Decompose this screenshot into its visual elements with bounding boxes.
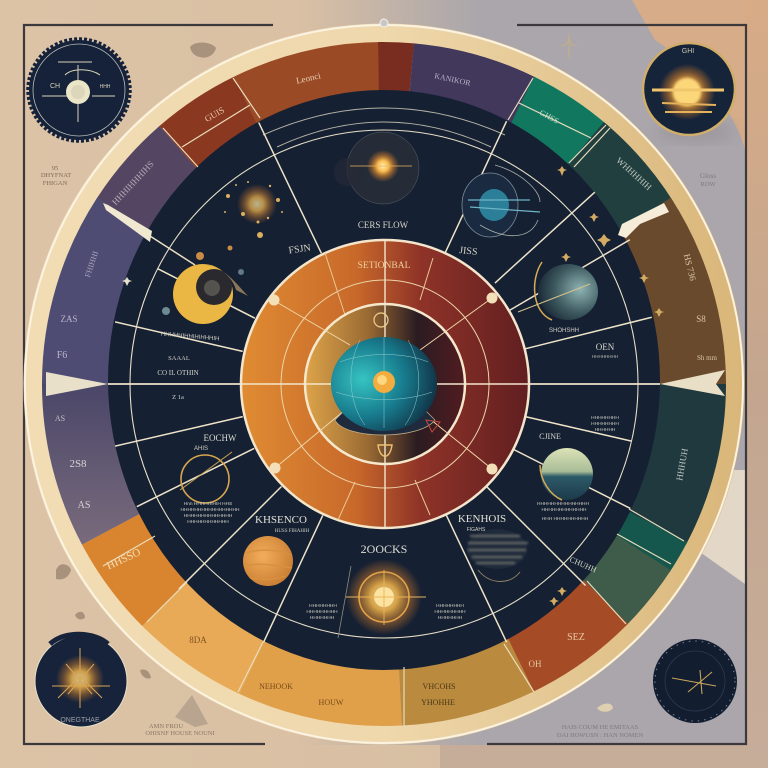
side captions: DAI HOWUSN : HAN NOMEN [557, 732, 643, 739]
planet: green: HHHHHHHH [591, 421, 619, 427]
band labels: FHIHHI [83, 250, 100, 279]
planet: jupiter: HHHHHHHH [309, 603, 337, 609]
segment band [78, 78, 690, 690]
planet: center bottom sun: HHHHHHH [438, 615, 463, 621]
segment: rust upper [183, 109, 250, 153]
band labels: 2S8 [69, 458, 87, 470]
side captions: FHIGAN [43, 180, 68, 187]
planet: gray nebula: OEN [596, 342, 615, 352]
segment: green top [518, 109, 585, 153]
segment: dark teal right [654, 384, 690, 528]
segment: rust lower [516, 598, 602, 660]
band labels: HOUW [319, 698, 344, 707]
planet: center bottom sun: 2OOCKS [361, 542, 407, 556]
node dots [268, 292, 498, 474]
planet: ring planet lower left: Z 1a [172, 394, 184, 401]
band labels: KANIKOR [434, 71, 472, 88]
band labels: HHHUH [674, 447, 690, 481]
segment: dark teal top [581, 150, 644, 222]
band labels: ZAS [60, 314, 78, 324]
medallion: top left: CH [50, 83, 60, 90]
side captions: HAIS COUM HE EMITAAS [562, 724, 639, 731]
side captions: OHISNF HOUSE NOUNI [145, 730, 215, 737]
planet: top sun [334, 132, 419, 230]
planet: gray nebula: SHOHSHH [549, 328, 579, 334]
planet: crescent: SAAAL [168, 355, 190, 362]
radial lines [108, 121, 660, 642]
side captions: AMN FROU [149, 723, 183, 730]
inner wheel: SETIONBAL [358, 261, 411, 271]
planet: blue nebula: JISS [459, 245, 478, 258]
planet: center bottom sun [338, 542, 466, 638]
disc arcs [130, 108, 638, 638]
planet: green: HHHHHH [595, 427, 616, 433]
planet: ring planet lower left: Hnn HHHHHIHIH HHS [184, 501, 232, 507]
planet: blue nebula [459, 165, 540, 258]
segment: purple left [127, 153, 183, 217]
planet: green [537, 415, 619, 522]
inner wheel [240, 240, 530, 528]
planet: jupiter: HHHHHHH [310, 615, 335, 621]
planet: striped [458, 513, 528, 582]
segment: orange [114, 528, 168, 600]
side captions: Gloss [700, 172, 716, 180]
planet: ring planet lower left: HHHHHHHHHHHHHHHHH [181, 507, 240, 513]
band labels: F6 [57, 350, 67, 361]
band labels [55, 70, 718, 707]
band labels: HHSSO [105, 546, 143, 572]
band labels: S8 [696, 314, 706, 324]
band labels: WHHHHIH [614, 155, 654, 193]
band labels: AS [78, 500, 90, 511]
planet: ring planet lower left: HHHHHHHHHHHHHH [184, 513, 233, 519]
band labels: YHOHHE [421, 698, 455, 707]
planet: jupiter: HUSS FIHAHIH [275, 529, 310, 534]
band labels: AS [55, 414, 65, 423]
flag markers [46, 203, 725, 396]
planet: green: HHHHHHHHHHHHH [541, 507, 587, 513]
medallion: bottom right [653, 639, 737, 723]
segment: brown right [641, 217, 690, 384]
medallion: top left [28, 39, 130, 141]
planet: crescent [157, 246, 248, 377]
side captions [41, 165, 716, 739]
band labels: NEHOOK [259, 682, 293, 691]
planet: center bottom sun: HHHHHHHH [436, 603, 464, 609]
band labels: HHHIHHHIHS [110, 159, 156, 207]
segment: gold [168, 600, 255, 661]
planet: striped: KENHOIS [458, 513, 506, 525]
band labels: HS 736 [682, 253, 698, 282]
side captions: ROW [700, 181, 716, 188]
planet: galaxy: FSJN [288, 243, 311, 257]
planet: gray nebula: HHHHHHHH [592, 354, 618, 359]
planet: jupiter: HHHHHHHHH [306, 609, 338, 615]
medallion: top right [643, 43, 735, 135]
band labels: Sh mm [697, 354, 718, 362]
planet: top sun: CERS FLOW [358, 220, 409, 230]
planet: ring planet lower left [172, 394, 240, 525]
planet: green: HHHHHHHH [591, 415, 619, 421]
band divider lines [103, 78, 684, 727]
band labels: VHCOHS [423, 682, 455, 691]
band labels: SEZ [567, 632, 585, 643]
planet: crescent: HHHHHIHHIHIHHHIH [161, 331, 220, 343]
planet: crescent: CO IL OTHIN [157, 369, 199, 377]
segment: purple top [411, 79, 523, 111]
band labels: Leonci [295, 70, 322, 86]
planet: jupiter: KHSENCO [255, 514, 307, 526]
planet: green: CJINE [539, 432, 561, 441]
band labels: GUIS [203, 105, 226, 124]
gold star specks [122, 166, 664, 606]
planet: ring planet lower left: EOCHW [204, 433, 237, 443]
segment: dark gold [400, 659, 518, 690]
segment: periwinkle [78, 217, 127, 384]
side captions: DHYFNAT [41, 172, 71, 179]
band labels: GHSS [538, 108, 560, 126]
band labels: OH [528, 659, 542, 669]
medallion: bottom left [35, 634, 127, 727]
center globe [331, 313, 440, 456]
medallion: top left: HHH [100, 84, 111, 90]
medallion: bottom left: ONEGTHAE [60, 717, 100, 724]
decorative specks [56, 43, 613, 727]
segment: muted green [600, 551, 641, 600]
segment: maroon top [379, 78, 411, 79]
planet: jupiter [243, 514, 338, 621]
planet: ring planet lower left: HHHHHHHHHHHH [187, 519, 229, 525]
planet: ring planet lower left: AHIS [194, 446, 208, 452]
dark disc [108, 90, 660, 670]
segment: green lower [639, 525, 655, 553]
segment: mauve [78, 384, 114, 528]
side captions: 95 [52, 165, 58, 172]
segment: rust brown top [250, 78, 384, 109]
planet: center bottom sun: HHHHHHHHH [434, 609, 466, 615]
band labels: 8DA [189, 635, 207, 645]
planet: gray nebula [518, 262, 618, 359]
medallion: top right: GHI [682, 48, 694, 55]
segment: light gold [255, 661, 400, 690]
planet: green: HHH HHHHHHHHHH [542, 516, 589, 522]
band labels: CHUHH [568, 555, 598, 575]
planet: striped: FIGAHS [467, 527, 486, 533]
planet: green: HHHHHHHHHHHHHHH [537, 501, 590, 507]
planet: galaxy [224, 181, 311, 257]
small cross ornament [561, 34, 577, 58]
